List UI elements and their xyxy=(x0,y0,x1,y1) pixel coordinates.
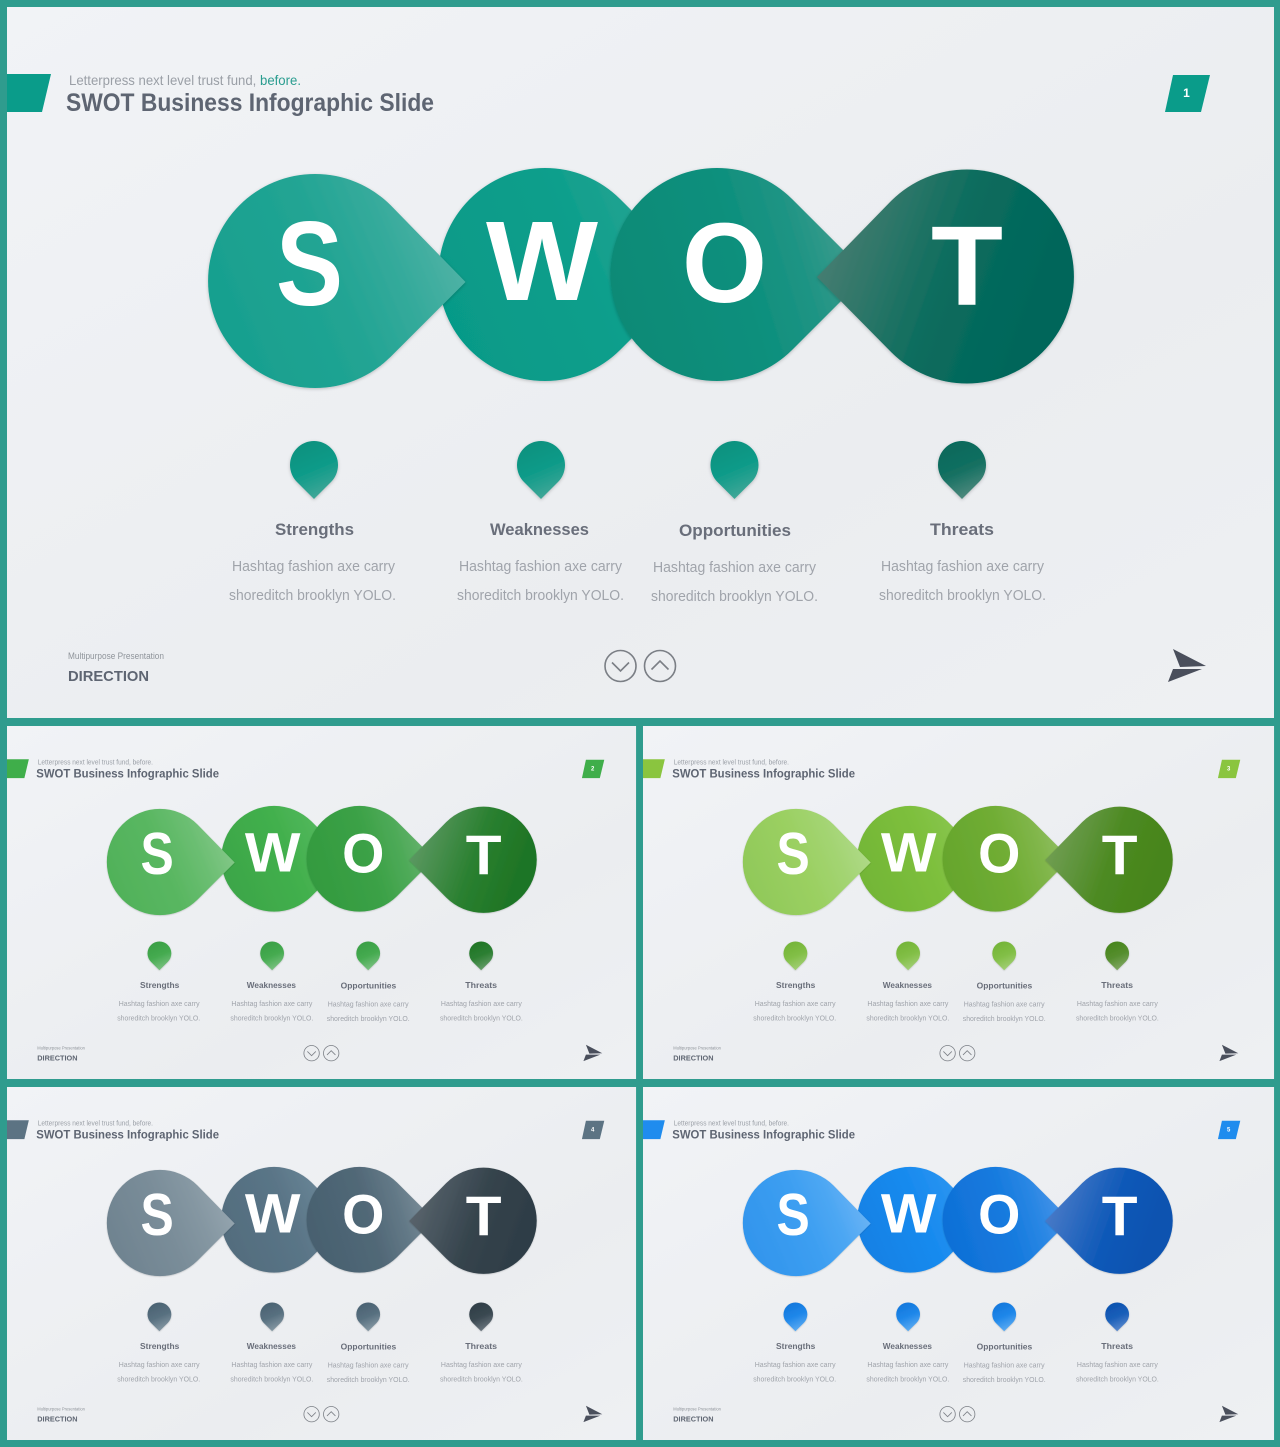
header tab xyxy=(7,1120,29,1139)
footer label xyxy=(673,1407,721,1424)
page number badge xyxy=(1165,75,1210,112)
column: Weaknesses: Weaknesses xyxy=(247,1341,296,1351)
O drop xyxy=(610,168,868,381)
page number badge xyxy=(582,1121,604,1139)
S drop xyxy=(743,1170,871,1276)
column: Threats xyxy=(879,441,1046,604)
slide 2: green SWOT xyxy=(7,726,636,1079)
footer label: Multipurpose Presentation xyxy=(68,651,164,661)
column: Threats: Hashtag fashion axe carry xyxy=(441,999,522,1008)
T drop: T xyxy=(931,203,1003,329)
column: Opportunities: shoreditch brooklyn YOLO. xyxy=(963,1014,1046,1023)
footer label: Multipurpose Presentation xyxy=(37,1407,85,1412)
title: SWOT Business Infographic Slide xyxy=(672,767,855,781)
title: SWOT Business Infographic Slide xyxy=(672,1128,855,1142)
W drop xyxy=(221,1167,349,1273)
column: Opportunities xyxy=(327,942,410,1023)
column: Opportunities: Opportunities xyxy=(977,981,1033,991)
column: Weaknesses: Weaknesses xyxy=(247,980,296,990)
footer label xyxy=(37,1407,85,1424)
navigation arrows xyxy=(304,1045,339,1061)
T drop xyxy=(1045,1168,1173,1274)
O drop xyxy=(943,1167,1070,1273)
column: Weaknesses: shoreditch brooklyn YOLO. xyxy=(230,1374,313,1383)
icon: paper plane xyxy=(1219,1045,1238,1061)
page number badge: 5 xyxy=(1227,1128,1231,1134)
column: Weaknesses: Weaknesses xyxy=(883,1341,932,1351)
column: Threats xyxy=(1076,1303,1159,1383)
column: Opportunities: Opportunities xyxy=(977,1342,1033,1352)
footer label xyxy=(673,1046,721,1063)
W drop: W xyxy=(881,820,936,883)
column: Strengths: Strengths xyxy=(776,1341,816,1351)
O drop: O xyxy=(978,821,1020,884)
O drop: O xyxy=(342,1182,384,1245)
page number badge: 2 xyxy=(591,767,595,773)
column: Threats: shoreditch brooklyn YOLO. xyxy=(1076,1374,1159,1383)
column: Threats: Hashtag fashion axe carry xyxy=(1077,999,1158,1008)
footer label: DIRECTION xyxy=(37,1054,77,1063)
slide 5: blue SWOT xyxy=(643,1087,1274,1440)
T drop: T xyxy=(466,1184,502,1247)
column: Weaknesses: Weaknesses xyxy=(883,980,932,990)
subtitle: Letterpress next level trust fund, before. xyxy=(38,1121,153,1128)
S drop: S xyxy=(276,197,343,331)
column: Opportunities: Hashtag fashion axe carry xyxy=(964,1361,1045,1370)
column: Threats xyxy=(440,1303,523,1383)
page number badge: 4 xyxy=(591,1128,595,1134)
column: Strengths: shoreditch brooklyn YOLO. xyxy=(753,1374,836,1383)
subtitle: Letterpress next level trust fund, before. xyxy=(674,760,789,767)
SWOT diagram xyxy=(208,168,1074,388)
column: Threats: shoreditch brooklyn YOLO. xyxy=(440,1013,523,1022)
column: Opportunities xyxy=(651,441,818,605)
column: Threats xyxy=(440,942,523,1022)
T drop: T xyxy=(1102,823,1138,886)
column: Opportunities: shoreditch brooklyn YOLO. xyxy=(327,1014,410,1023)
column: Weaknesses xyxy=(230,942,313,1022)
icon: paper plane xyxy=(583,1406,602,1422)
S drop: S xyxy=(777,820,810,887)
navigation arrows xyxy=(605,650,676,682)
column: Weaknesses: shoreditch brooklyn YOLO. xyxy=(457,588,624,604)
subtitle: Letterpress next level trust fund, before. xyxy=(38,760,153,767)
O drop: O xyxy=(342,821,384,884)
column: Opportunities: Opportunities xyxy=(341,981,397,991)
header tab xyxy=(7,759,29,778)
T drop xyxy=(409,1168,537,1274)
footer label: DIRECTION xyxy=(37,1415,77,1424)
slide 3: light green SWOT xyxy=(643,726,1274,1079)
column: Strengths: Hashtag fashion axe carry xyxy=(119,1360,200,1369)
column: Opportunities: Hashtag fashion axe carry xyxy=(964,1000,1045,1009)
column: Threats: shoreditch brooklyn YOLO. xyxy=(440,1374,523,1383)
W drop: W xyxy=(881,1181,936,1244)
title: SWOT Business Infographic Slide xyxy=(36,767,219,781)
W drop xyxy=(438,168,696,381)
column: Threats: Hashtag fashion axe carry xyxy=(881,559,1045,575)
column: Weaknesses: Hashtag fashion axe carry xyxy=(459,559,623,575)
column: Weaknesses: Hashtag fashion axe carry xyxy=(231,1360,313,1369)
column: Weaknesses: Hashtag fashion axe carry xyxy=(867,999,949,1008)
T drop: T xyxy=(1102,1184,1138,1247)
T drop xyxy=(1045,807,1173,913)
column: Strengths: shoreditch brooklyn YOLO. xyxy=(753,1013,836,1022)
T drop xyxy=(817,170,1074,384)
page number badge xyxy=(1218,760,1240,778)
column: Strengths: shoreditch brooklyn YOLO. xyxy=(117,1374,200,1383)
SWOT diagram xyxy=(107,1167,537,1276)
column: Threats: shoreditch brooklyn YOLO. xyxy=(1076,1013,1159,1022)
column: Weaknesses: shoreditch brooklyn YOLO. xyxy=(866,1374,949,1383)
column: Strengths: Strengths xyxy=(140,1341,180,1351)
W drop xyxy=(857,1167,985,1273)
column: Opportunities: Opportunities xyxy=(679,521,791,540)
icon: paper plane xyxy=(1219,1406,1238,1422)
column: Weaknesses: shoreditch brooklyn YOLO. xyxy=(866,1013,949,1022)
W drop xyxy=(221,806,349,912)
W drop xyxy=(857,806,985,912)
O drop xyxy=(943,806,1070,912)
W drop: W xyxy=(486,198,598,324)
header tab xyxy=(7,74,51,112)
slide 1: teal SWOT xyxy=(7,7,1274,718)
title: SWOT Business Infographic Slide xyxy=(36,1128,219,1142)
header tab xyxy=(643,1120,665,1139)
column: Weaknesses: Weaknesses xyxy=(490,520,589,539)
column: Threats: Hashtag fashion axe carry xyxy=(441,1360,522,1369)
column: Threats xyxy=(1076,942,1159,1022)
column: Strengths: Hashtag fashion axe carry xyxy=(755,1360,836,1369)
footer label: Multipurpose Presentation xyxy=(37,1046,85,1051)
S drop xyxy=(208,174,466,388)
column: Weaknesses xyxy=(230,1303,313,1383)
column: Threats: Threats xyxy=(1101,980,1133,990)
SWOT diagram xyxy=(743,806,1173,915)
column: Threats: Threats xyxy=(1101,1341,1133,1351)
column: Strengths: Strengths xyxy=(776,980,816,990)
column: Weaknesses: Hashtag fashion axe carry xyxy=(867,1360,949,1369)
column: Weaknesses xyxy=(866,942,949,1022)
O drop: O xyxy=(978,1182,1020,1245)
column: Opportunities xyxy=(327,1303,410,1384)
column: Opportunities: shoreditch brooklyn YOLO. xyxy=(327,1375,410,1384)
column: Threats: shoreditch brooklyn YOLO. xyxy=(879,588,1046,604)
T drop: T xyxy=(466,823,502,886)
S drop: S xyxy=(141,820,174,887)
page number badge xyxy=(582,760,604,778)
footer label: DIRECTION xyxy=(673,1054,713,1063)
page number badge xyxy=(1218,1121,1240,1139)
column: Threats: Threats xyxy=(465,1341,497,1351)
column: Weaknesses: shoreditch brooklyn YOLO. xyxy=(230,1013,313,1022)
column: Opportunities: Opportunities xyxy=(341,1342,397,1352)
navigation arrows xyxy=(304,1406,339,1422)
icon: paper plane xyxy=(1168,649,1206,682)
column: Strengths xyxy=(753,1303,836,1383)
column: Weaknesses xyxy=(866,1303,949,1383)
column: Strengths xyxy=(117,1303,200,1383)
O drop xyxy=(307,806,434,912)
column: Strengths xyxy=(753,942,836,1022)
icon: paper plane xyxy=(583,1045,602,1061)
column: Threats: Threats xyxy=(930,520,994,539)
footer label xyxy=(68,651,164,685)
S drop xyxy=(107,1170,235,1276)
column: Opportunities: shoreditch brooklyn YOLO. xyxy=(651,589,818,605)
column: Opportunities: Hashtag fashion axe carry xyxy=(328,1000,409,1009)
header tab xyxy=(643,759,665,778)
slide 4: slate SWOT xyxy=(7,1087,636,1440)
T drop xyxy=(409,807,537,913)
O drop: O xyxy=(682,200,767,326)
page number badge: 3 xyxy=(1227,767,1231,773)
column: Threats: Threats xyxy=(465,980,497,990)
column: Opportunities xyxy=(963,1303,1046,1384)
column: Opportunities: shoreditch brooklyn YOLO. xyxy=(963,1375,1046,1384)
column: Strengths: shoreditch brooklyn YOLO. xyxy=(117,1013,200,1022)
SWOT diagram xyxy=(743,1167,1173,1276)
column: Weaknesses: Hashtag fashion axe carry xyxy=(231,999,313,1008)
S drop xyxy=(743,809,871,915)
W drop: W xyxy=(245,820,300,883)
column: Strengths: Hashtag fashion axe carry xyxy=(232,559,396,575)
column: Strengths xyxy=(117,942,200,1022)
footer label xyxy=(37,1046,85,1063)
footer label: DIRECTION xyxy=(68,668,149,685)
column: Strengths xyxy=(229,441,396,604)
navigation arrows xyxy=(940,1406,975,1422)
column: Strengths: Strengths xyxy=(140,980,180,990)
column: Strengths: Hashtag fashion axe carry xyxy=(119,999,200,1008)
column: Strengths: shoreditch brooklyn YOLO. xyxy=(229,588,396,604)
column: Weaknesses xyxy=(457,441,624,604)
subtitle: Letterpress next level trust fund, before. xyxy=(674,1121,789,1128)
footer label: Multipurpose Presentation xyxy=(673,1046,721,1051)
S drop: S xyxy=(777,1181,810,1248)
column: Opportunities xyxy=(963,942,1046,1023)
W drop: W xyxy=(245,1181,300,1244)
footer label: DIRECTION xyxy=(673,1415,713,1424)
subtitle: Letterpress next level trust fund, before. xyxy=(69,72,301,88)
column: Strengths: Strengths xyxy=(275,520,354,539)
page number badge: 1 xyxy=(1183,86,1190,100)
title: SWOT Business Infographic Slide xyxy=(66,89,434,117)
column: Opportunities: Hashtag fashion axe carry xyxy=(653,560,817,576)
navigation arrows xyxy=(940,1045,975,1061)
S drop: S xyxy=(141,1181,174,1248)
O drop xyxy=(307,1167,434,1273)
column: Threats: Hashtag fashion axe carry xyxy=(1077,1360,1158,1369)
column: Opportunities: Hashtag fashion axe carry xyxy=(328,1361,409,1370)
S drop xyxy=(107,809,235,915)
footer label: Multipurpose Presentation xyxy=(673,1407,721,1412)
column: Strengths: Hashtag fashion axe carry xyxy=(755,999,836,1008)
SWOT diagram xyxy=(107,806,537,915)
